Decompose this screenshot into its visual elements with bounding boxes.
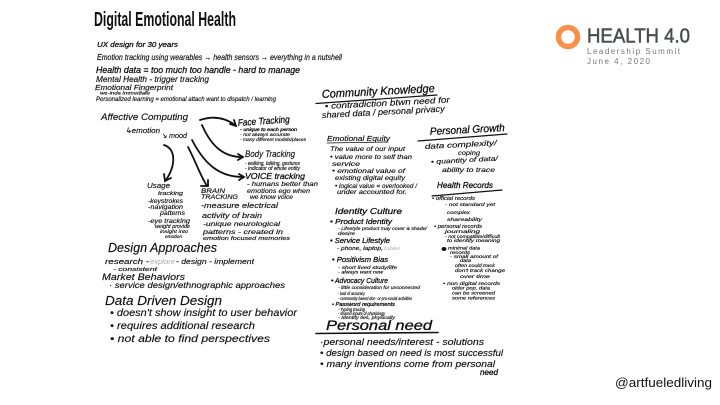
panel: health records: records [450,250,471,255]
panel: health records: journaling [443,229,481,234]
panel: health records: shareability [447,217,483,222]
emotion to mood note: ↳emotion [125,126,160,135]
text block: voice tracking [245,171,318,201]
panel: identity culture: - always want new [338,270,384,274]
text block: brain tracking [201,188,290,242]
panel: identity culture: - short lived study/life [338,265,398,270]
text block: body tracking: - indicator of whole entity [245,166,301,172]
panel: community knowledge: Community Knowledge [322,83,435,101]
panel: personal need: Personal need [326,318,433,333]
panel: data driven design: • doesn't show insight to user behavior [110,307,298,319]
text block: body tracking [245,149,301,172]
panel: identity culture: - Typing tracing [338,307,365,312]
panel: design approaches: research - [105,257,150,266]
panel: identity culture: • Positivism Bias [332,255,388,264]
text block: usage tracking: tracking [158,191,184,197]
panel: design approaches: Market Behaviors [102,272,185,283]
panel: community knowledge: • contradiction btwn need for [325,94,451,111]
panel: emotional equity: The value of our input [330,146,406,153]
text block: usage tracking: insight into [160,229,189,234]
panel: identity culture: - phone, laptop, [337,246,383,252]
heading: affective computing: Affective Computing [100,112,189,123]
panel: personal need [316,318,504,377]
panel: health records: don't track change [455,268,506,273]
panel: personal growth: • quantity of data/ [431,155,500,166]
panel: health records: - small amount of [450,254,499,259]
panel: emotional equity: Emotional Equity [327,134,391,143]
text block: face tracking: - many different models/places [240,137,307,142]
arrow: to voice tracking [192,140,244,180]
logo: Health 4.0 Leadership Summit: Leadership Summit [587,47,681,56]
text block: brain tracking: -unique neurological [203,221,281,228]
panel: health records: data [460,258,472,263]
text block: usage tracking: -keystrokes [148,198,184,205]
panel: identity culture: • Product Identity [330,217,393,226]
text block: voice tracking: emotions ego when [247,188,310,195]
panel: data driven design: • not able to find perspectives [110,333,271,345]
panel: health records: over time [460,274,491,279]
panel: health records: older pop. data [452,286,491,290]
panel: identity culture: • Password requirements [332,302,395,308]
panel: affective computing [100,112,318,242]
text block: voice tracking: VOICE tracking [245,171,305,181]
text block: face tracking: Face Tracking [237,114,291,129]
panel: community knowledge: shared data / personal privacy [322,104,446,120]
text block: brain tracking: activity of brain [202,211,262,220]
panel: emotional equity: • logical value = overlooked / [335,183,418,190]
text block: usage tracking: Usage [147,181,170,190]
panel: emotional equity: • value more to self than [330,154,412,161]
panel: health records: often could track [455,263,496,268]
panel: design approaches: - design - implement [176,257,255,266]
panel: personal need: need [480,367,498,377]
panel: design approaches [102,240,286,290]
panel: health records: minimal data [448,246,481,250]
text block: usage tracking: patterns [159,210,186,217]
panel: personal need: • design based on need is most successful [320,348,504,359]
panel: identity culture: - Lifestyle product may cover & shade/ [338,226,428,231]
panel: health records: some references [452,296,496,300]
text block: usage tracking: weight provide [155,224,190,230]
panel: health records: • personal records [434,224,482,230]
panel: design approaches: explore [150,257,175,266]
text block: usage tracking: emotion [165,234,183,239]
panel: identity culture: - Identity ties, physically [338,315,396,320]
panel: community knowledge [316,83,451,120]
text block: brain tracking: -measure electrical [201,201,278,210]
text block: usage tracking: -eye tracking [148,218,190,225]
panel: design approaches: · service design/ethnographic approaches [109,280,286,290]
panel: identity culture: - little consideration for unconnected [338,285,421,290]
panel: identity culture: Identity Culture [335,206,402,216]
panel: identity culture: • Service Lifestyle [330,236,390,245]
panel: health records: to identify meaning [447,238,501,243]
panel: data driven design: Data Driven Design [105,293,222,308]
panel: emotional equity [327,134,418,196]
panel: identity culture: tablet [384,246,401,251]
credit handle: @artfueledliving [615,375,712,390]
text block: usage tracking [147,181,190,239]
panel: personal growth: data complexity/ [425,138,498,151]
panel: personal growth: ability to trace [442,167,495,174]
panel: health records: Health Records [437,180,494,190]
logo: Health 4.0 Leadership Summit [558,26,690,66]
emotion to mood note: ↘ mood [161,131,188,140]
panel: health records: • official records [432,196,475,202]
panel: personal growth: coping [458,150,480,157]
text block: voice tracking: we know voice [250,194,293,201]
panel: data driven design [105,293,298,345]
text block: face tracking: - not always accurate [240,132,291,137]
panel: personal growth: Personal Growth [430,122,505,138]
arrow: to brain tracking [188,147,208,186]
panel: identity culture: - community based don- or pro-social activities [338,296,413,301]
text block: intro notes: Personalized learning = emotional attach want to dispatch / learning [96,96,276,103]
text block: intro notes: Emotional Fingerprint [95,83,174,92]
panel: personal need: ·personal needs/interest - solutions [320,337,484,348]
text block: intro notes: Health data = too much too handle - hard to manage [96,65,300,76]
text block: brain tracking: BRAIN [201,188,225,195]
panel: health records: - not compatible/difficult [445,234,501,239]
text block: face tracking: - unique to each person [240,127,298,132]
text block: intro notes: UX design for 30 years [97,40,178,49]
panel: health records [432,180,506,300]
panel: health records: complex [447,210,471,215]
panel: emotional equity: under accounted for. [337,189,407,196]
text block: body tracking: Body Tracking [245,149,296,160]
text block: intro notes [95,40,343,103]
panel: health records: can be screened [452,290,496,296]
text block: body tracking: - walking, talking, gestures [245,161,300,167]
panel: emotional equity: service [332,161,361,168]
arrow: to face tracking [200,118,236,126]
panel: identity culture: - shared inputs of physiology [338,311,386,316]
text block: usage tracking: -navigation [148,204,183,211]
panel: personal need: • many inventions come from personal [320,359,496,370]
panel: design approaches: - consistent [113,267,158,273]
title: Digital Emotional Health [94,9,236,31]
logo: Health 4.0 Leadership Summit: HEALTH 4.0 [587,26,690,48]
panel: identity culture [330,206,428,320]
text block: intro notes: Emotion tracking using wearables → health sensors → everything in a nutshell [97,52,343,62]
panel: identity culture: desire [338,231,356,236]
panel: personal growth [418,122,507,174]
panel: emotional equity: • emotional value of [332,168,407,175]
text block: brain tracking: emotion focused memories [203,236,290,242]
text block: face tracking [237,114,307,142]
panel: health records: - not standard yet [445,202,496,207]
emotion to mood note [125,126,188,140]
panel: emotional equity: existing digital equity [335,175,406,182]
panel: data driven design: • requires additional research [110,320,255,332]
arrow: to body tracking [202,125,243,160]
panel: identity culture: - lack of accuracy [338,291,366,296]
text block: brain tracking: patterns - created in [202,229,284,236]
arrow: to usage tracking [164,145,173,181]
logo: Health 4.0 Leadership Summit: June 4, 2020 [587,57,651,66]
text block: intro notes: we-inda immediate [100,90,151,96]
panel: health records: • non digital records [443,281,501,286]
text block: brain tracking: TRACKING [201,194,238,201]
panel: identity culture: • Advocacy Culture [331,276,388,285]
text block: voice tracking: - humans better than [247,181,318,188]
text block: intro notes: Mental Health - trigger tracking [96,74,209,84]
panel: design approaches: Design Approaches [108,240,217,255]
